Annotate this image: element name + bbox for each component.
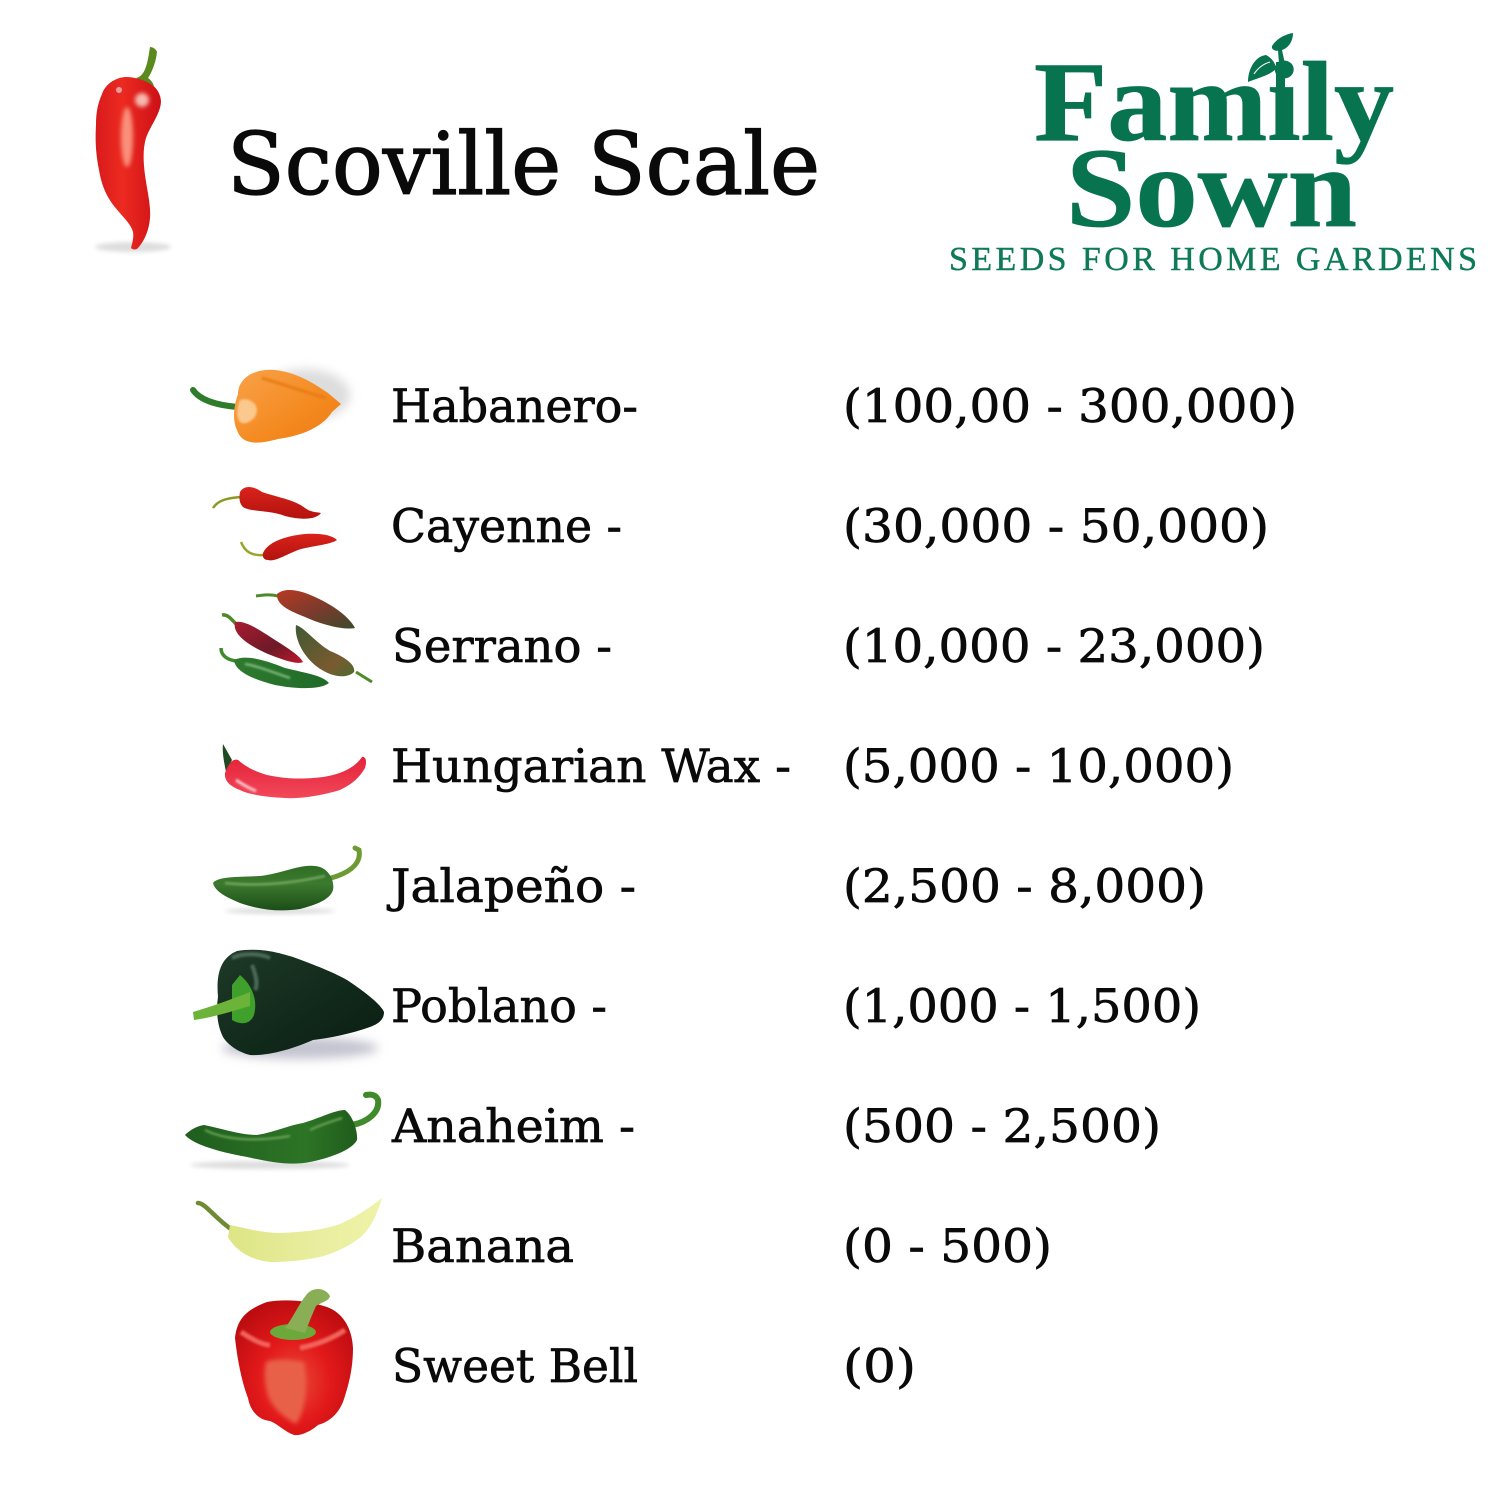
title: Scoville Scale: [227, 115, 820, 215]
icon: poblano pepper: [193, 950, 384, 1059]
icon: anaheim pepper: [185, 1095, 378, 1169]
icon: banana pepper: [198, 1198, 382, 1262]
logo word: Family: Family: [1034, 40, 1394, 165]
value: (100,00 - 300,000): [843, 379, 1297, 433]
logo tagline: SEEDS FOR HOME GARDENS: [949, 241, 1477, 278]
icon: cayenne peppers: [213, 487, 337, 560]
icon: hungarian wax pepper: [223, 744, 366, 798]
logo word: Sown: Sown: [1066, 126, 1357, 251]
value: (1,000 - 1,500): [843, 979, 1201, 1033]
label: Jalapeño -: [387, 859, 636, 913]
logo icon: sprout leaves: [1248, 33, 1293, 90]
row: Sweet Bell: [235, 1289, 916, 1435]
value: (10,000 - 23,000): [843, 619, 1265, 673]
label: Hungarian Wax -: [391, 739, 791, 793]
icon: red chili pepper: [95, 47, 171, 252]
label: Serrano -: [392, 619, 612, 673]
icon: red bell pepper: [235, 1289, 353, 1435]
label: Habanero-: [391, 379, 638, 433]
value: (2,500 - 8,000): [843, 859, 1206, 913]
row: Banana: [198, 1198, 1052, 1273]
row: Serrano: [221, 590, 1265, 688]
logo: Family Sown: [949, 33, 1477, 278]
row: Jalapeño: [213, 848, 1206, 914]
value: (500 - 2,500): [843, 1099, 1161, 1153]
label: Cayenne -: [391, 499, 622, 553]
value: (0 - 500): [843, 1219, 1052, 1273]
label: Anaheim -: [391, 1099, 635, 1153]
icon: jalapeño pepper: [213, 848, 359, 914]
value: (30,000 - 50,000): [843, 499, 1269, 553]
row: Poblano: [193, 950, 1201, 1059]
value: (0): [843, 1339, 916, 1393]
row: Habanero: [193, 369, 1297, 443]
row: Cayenne: [213, 487, 1269, 560]
icon: serrano peppers: [221, 590, 372, 688]
label: Sweet Bell: [392, 1339, 638, 1393]
label: Banana: [391, 1219, 574, 1273]
row: Hungarian Wax: [223, 739, 1234, 798]
row: Anaheim: [185, 1095, 1161, 1169]
icon: habanero pepper: [193, 369, 350, 443]
label: Poblano -: [391, 979, 607, 1033]
value: (5,000 - 10,000): [843, 739, 1234, 793]
